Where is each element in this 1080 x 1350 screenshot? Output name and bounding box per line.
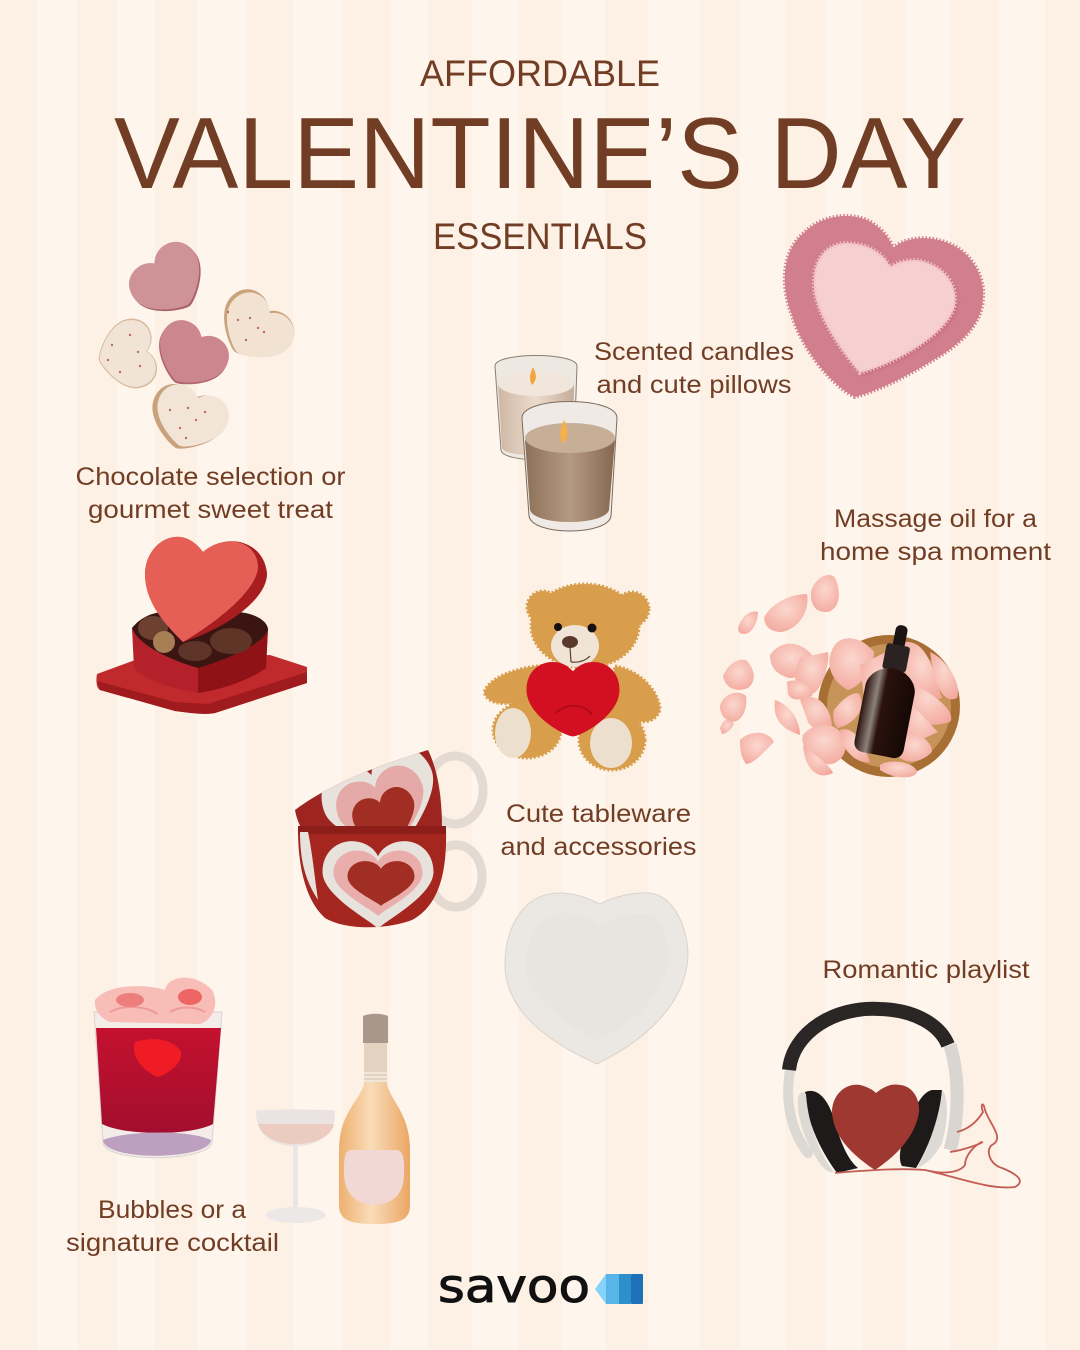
icon: rosé bottle <box>339 1014 410 1224</box>
icon: heart pillow <box>785 216 983 397</box>
label: chocolate <box>76 463 346 524</box>
label: playlist: Romantic playlist <box>822 956 1030 984</box>
panel: massage oil <box>720 505 1051 777</box>
label: chocolate: Chocolate selection or <box>76 463 346 491</box>
label: bubbles: Bubbles or a <box>98 1196 246 1224</box>
title: ESSENTIALS <box>433 216 647 257</box>
label: massage oil: Massage oil for a <box>834 505 1037 533</box>
label: tableware <box>500 800 696 861</box>
icon: heart macarons <box>93 233 303 462</box>
label: tableware: and accessories <box>500 833 696 861</box>
logo: savoo: savoo <box>438 1259 590 1313</box>
label: bubbles <box>66 1196 279 1257</box>
panel: romantic playlist <box>788 956 1030 1187</box>
label: candles: and cute pillows <box>596 371 792 399</box>
label: massage oil: home spa moment <box>820 538 1051 566</box>
label: chocolate: gourmet sweet treat <box>88 496 333 524</box>
title: VALENTINE’S DAY <box>114 98 966 210</box>
panel: bubbles and cocktail <box>66 978 410 1257</box>
panel: teddy bear <box>484 584 660 770</box>
icon: rose petals and oil bottle <box>720 575 960 777</box>
icon: headphones with heart <box>788 1009 1020 1187</box>
icon: heart chocolate box <box>96 537 307 714</box>
panel: tableware <box>295 738 696 1064</box>
icon: scented candles <box>495 356 617 531</box>
label: bubbles: signature cocktail <box>66 1229 279 1257</box>
title <box>114 53 966 257</box>
icon: teddy bear with heart <box>484 584 660 770</box>
icon: heart plate <box>505 893 688 1064</box>
label: massage oil <box>820 505 1051 566</box>
label: tableware: Cute tableware <box>506 800 691 828</box>
icon: red cocktail with roses <box>94 978 222 1158</box>
panel: candles and pillows <box>495 216 983 531</box>
panel: chocolate and sweet treats <box>76 233 346 714</box>
label: candles: Scented candles <box>594 338 794 366</box>
label: candles <box>594 338 794 399</box>
icon: coupe glass <box>256 1110 335 1223</box>
logo: savoo <box>438 1259 643 1313</box>
icon: stacked heart mugs <box>295 738 483 929</box>
title: AFFORDABLE <box>420 53 660 94</box>
